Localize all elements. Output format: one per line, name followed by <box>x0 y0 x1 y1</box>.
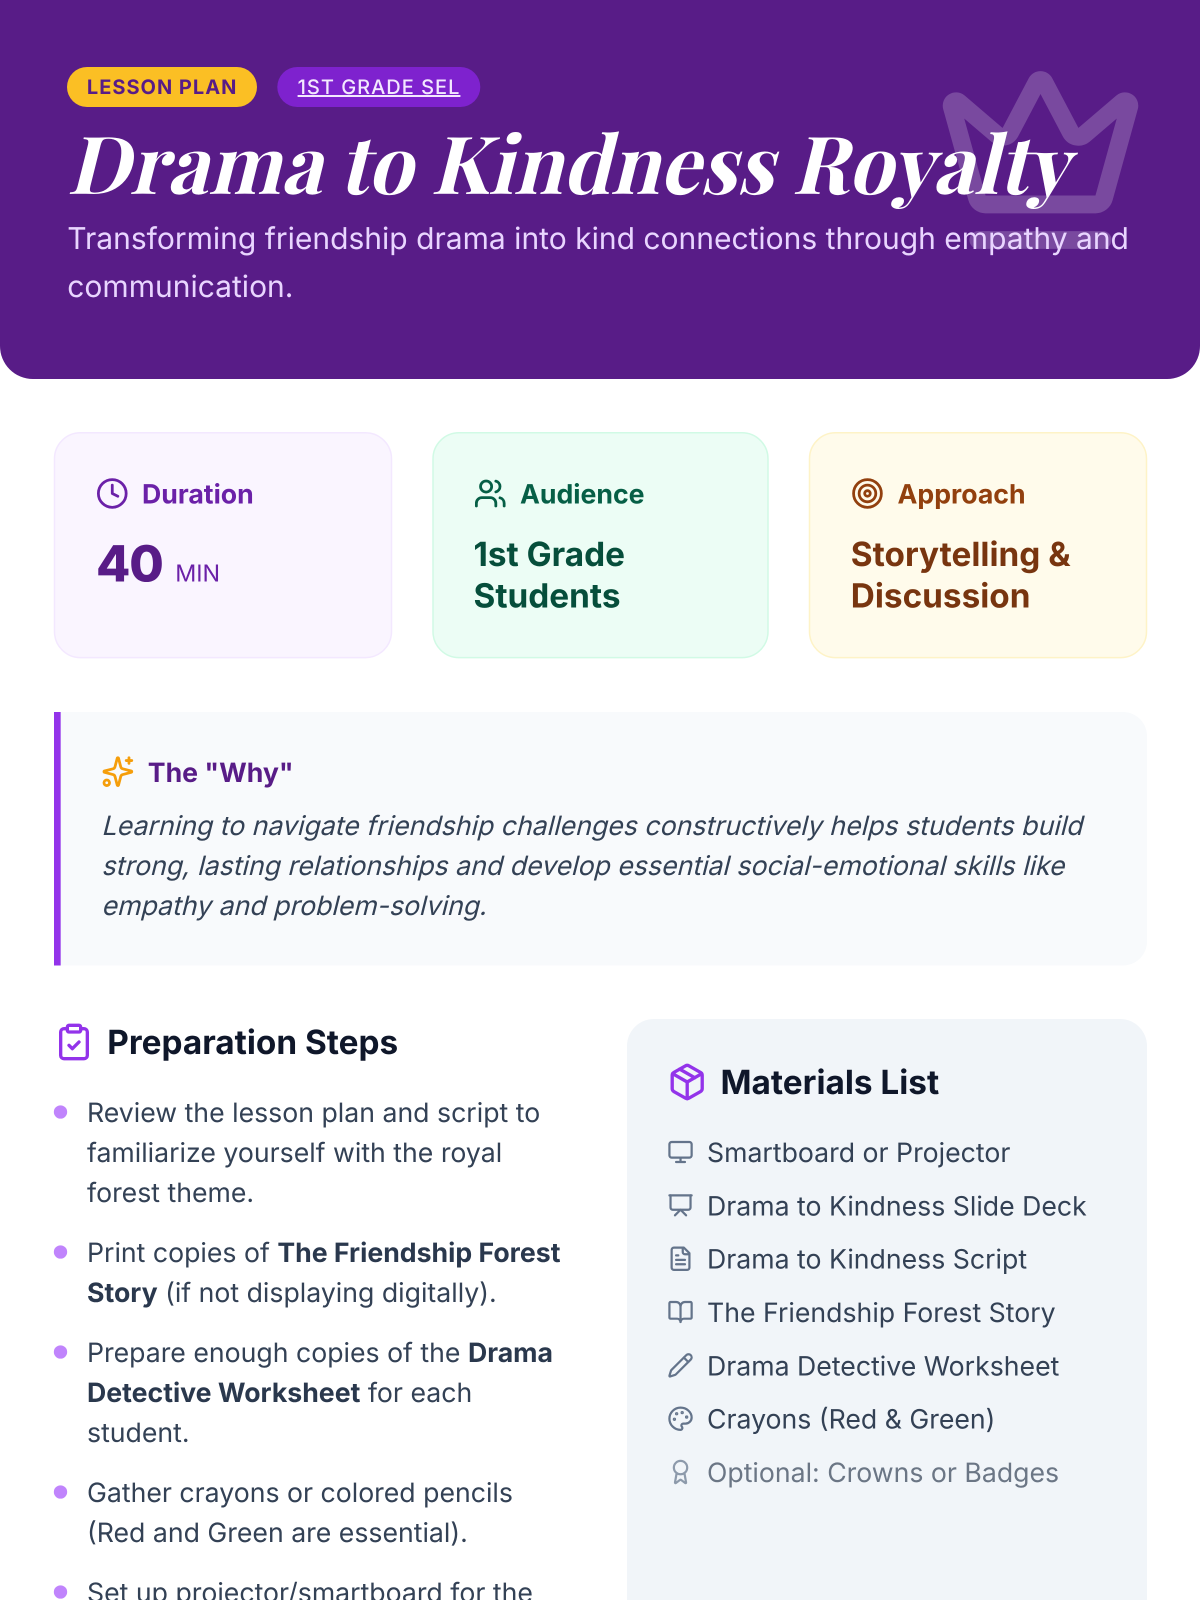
text: why paragraph: empathy and problem-solving. <box>99 890 493 922</box>
value: 1st grade students: 1st Grade <box>474 535 625 575</box>
icon: users <box>476 481 504 506</box>
step 4: Gather crayons or colored pencils <box>87 1477 513 1509</box>
value: 40 min <box>96 534 220 594</box>
heading: the why: The "Why" <box>148 757 294 789</box>
step 3 <box>54 1337 553 1449</box>
item: crayons: Crayons (Red & Green) <box>707 1404 995 1436</box>
label: audience: Audience <box>520 478 645 510</box>
panel: approach <box>810 433 1146 658</box>
step 3: Prepare enough copies of the Drama <box>87 1337 553 1369</box>
heading: materials list: Materials List <box>720 1063 939 1103</box>
badge: 1st grade SEL <box>277 67 480 107</box>
badge: lesson plan: LESSON PLAN <box>87 75 237 99</box>
icon: sparkles <box>104 758 132 786</box>
icon: crown watermark <box>952 80 1129 240</box>
title: Drama to Kindness Royalty <box>62 108 1090 215</box>
step 4 <box>54 1477 513 1549</box>
badge: lesson plan <box>67 67 257 107</box>
value: storytelling and discussion: Discussion <box>851 576 1030 616</box>
section: preparation steps <box>54 1023 561 1600</box>
value: 40 min: MIN <box>175 558 220 588</box>
value: storytelling and discussion: Storytelling & <box>851 535 1071 575</box>
step 2 <box>54 1237 561 1309</box>
icon: clipboard check <box>61 1025 87 1059</box>
step 1: Review the lesson plan and script to <box>87 1097 540 1129</box>
step 3: Detective Worksheet for each <box>87 1377 472 1409</box>
subtitle <box>67 221 1129 305</box>
icon: package <box>672 1065 702 1099</box>
item: script: Drama to Kindness Script <box>707 1244 1027 1276</box>
panel: the why <box>54 712 1147 966</box>
value: 40 min: 40 <box>96 534 163 594</box>
icon: target <box>854 480 881 507</box>
panel: materials list <box>627 1019 1147 1600</box>
badge: 1st grade SEL: 1ST GRADE SEL <box>298 75 460 99</box>
item: smartboard: Smartboard or Projector <box>707 1137 1010 1169</box>
text: why paragraph: Learning to navigate friendship challenges constructively helps students build <box>99 810 1088 842</box>
header banner <box>0 0 1200 379</box>
item: worksheet: Drama Detective Worksheet <box>707 1350 1060 1382</box>
subtitle: Transforming friendship drama into kind connections through empathy and <box>67 221 1129 257</box>
item: story: The Friendship Forest Story <box>707 1297 1056 1329</box>
label: duration: Duration <box>142 478 254 510</box>
text: why paragraph: strong, lasting relationships and develop essential social-emotional skills like <box>99 850 1070 882</box>
icon: clock <box>98 480 126 507</box>
value: 1st grade students <box>474 535 625 616</box>
step 4: (Red and Green are essential). <box>87 1517 468 1549</box>
value: 1st grade students: Students <box>474 576 621 616</box>
step 1 <box>54 1097 540 1209</box>
value: storytelling and discussion <box>851 535 1071 616</box>
label: approach: Approach <box>898 478 1026 510</box>
step 2: Print copies of The Friendship Forest <box>87 1237 561 1269</box>
step 1: forest theme. <box>87 1177 254 1209</box>
item: crowns or badges: Optional: Crowns or Badges <box>707 1457 1059 1489</box>
panel: audience <box>433 433 768 658</box>
item: slide deck: Drama to Kindness Slide Deck <box>707 1190 1087 1222</box>
panel: duration <box>54 433 392 658</box>
step 2: Story (if not displaying digitally). <box>87 1277 497 1309</box>
subtitle: communication. <box>67 269 293 305</box>
heading: preparation steps: Preparation Steps <box>107 1023 398 1063</box>
step 1: familiarize yourself with the royal <box>87 1137 502 1169</box>
step 3: student. <box>87 1417 190 1449</box>
text: why paragraph <box>99 810 1088 922</box>
